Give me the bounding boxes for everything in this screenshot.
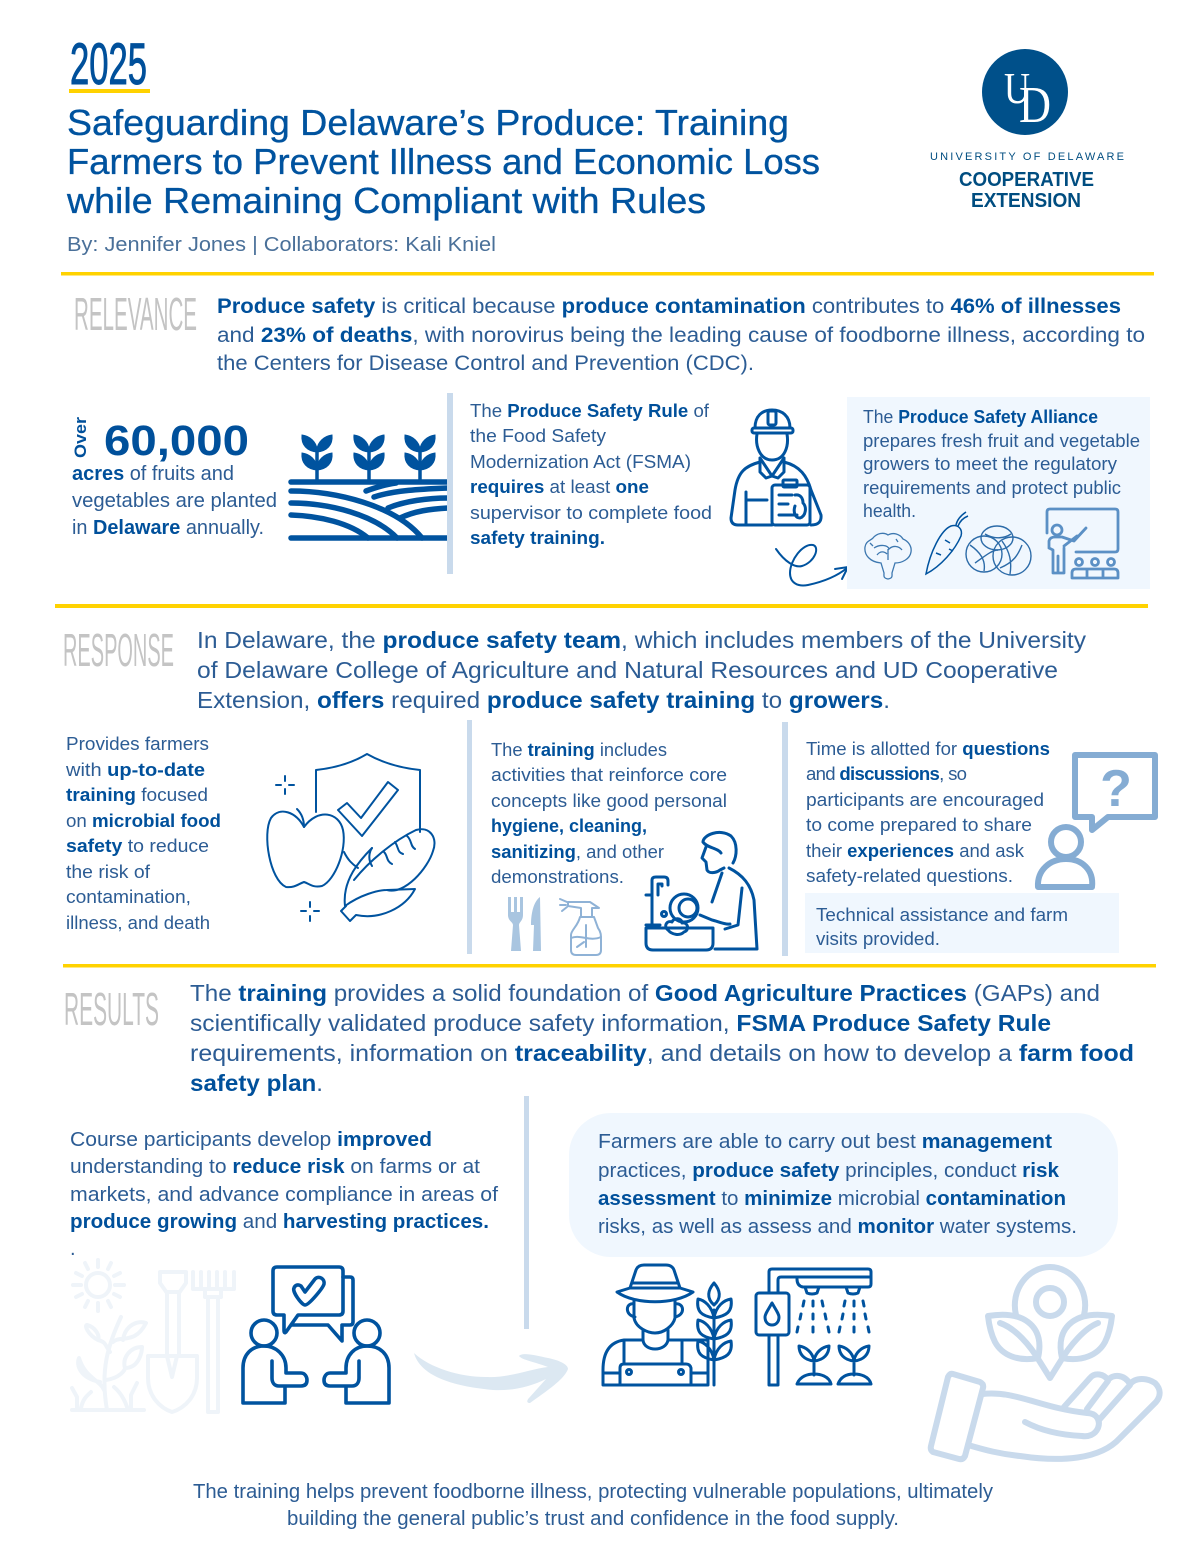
stat: 60,000 acres: in Delaware annually. bbox=[72, 517, 264, 539]
icon: person with question bubble: ? bbox=[1100, 760, 1132, 818]
text: up-to-date training: with up-to-date bbox=[65, 759, 205, 780]
text: produce safety rule: supervisor to complete food bbox=[470, 502, 712, 523]
icon: person washing dishes bbox=[646, 832, 757, 950]
byline: By: Jennifer Jones | Collaborators: Kali Kniel bbox=[67, 234, 496, 256]
text: training activities: demonstrations. bbox=[491, 866, 624, 887]
closing statement: The training helps prevent foodborne illness, protecting vulnerable populations, ultimately bbox=[193, 1481, 993, 1503]
title: while Remaining Compliant with Rules bbox=[66, 180, 706, 221]
text: course participants: . bbox=[70, 1238, 76, 1260]
callout: farmers outcomes: Farmers are able to carry out best management bbox=[598, 1131, 1052, 1153]
icon: fork and knife bbox=[508, 897, 541, 951]
response intro text: Extension, offers required produce safety training to growers. bbox=[197, 687, 890, 713]
text: up-to-date training: safety to reduce bbox=[66, 835, 209, 856]
relevance intro text: the Centers for Disease Control and Prevention (CDC). bbox=[217, 351, 754, 375]
logo: University of Delaware Cooperative Extension: EXTENSION bbox=[971, 190, 1081, 212]
year heading bbox=[69, 32, 150, 97]
text: training activities: concepts like good personal bbox=[491, 790, 727, 811]
text: questions and discussions bbox=[806, 738, 1050, 886]
text: questions and discussions: Time is allotted for questions bbox=[806, 738, 1050, 759]
icon: shield, apple and produce bbox=[267, 754, 434, 921]
closing statement bbox=[193, 1481, 993, 1530]
arrow: curved to outcomes bbox=[414, 1353, 568, 1403]
stat: 60,000 acres: 60,000 bbox=[104, 417, 249, 465]
text: questions and discussions: participants are encouraged bbox=[806, 789, 1044, 810]
callout: technical assistance: visits provided. bbox=[816, 928, 940, 949]
panel: results: RESULTS bbox=[64, 983, 159, 1035]
callout: farmers outcomes: assessment to minimize microbial contamination bbox=[598, 1188, 1066, 1210]
icon: two people discussing bbox=[243, 1267, 389, 1403]
logo: University of Delaware Cooperative Extension: UNIVERSITY OF DELAWARE bbox=[930, 151, 1124, 163]
text: produce safety rule: the Food Safety bbox=[470, 425, 607, 446]
year heading: 2025 bbox=[70, 32, 147, 97]
text: produce safety rule: safety training. bbox=[470, 527, 605, 548]
title: Safeguarding Delaware’s Produce: Training bbox=[67, 102, 789, 143]
text: up-to-date training: contamination, bbox=[66, 886, 191, 907]
text: produce safety rule bbox=[470, 400, 712, 548]
text: up-to-date training: the risk of bbox=[66, 861, 151, 882]
results intro text bbox=[190, 980, 1134, 1096]
response intro text bbox=[197, 627, 1087, 713]
text: course participants bbox=[70, 1129, 498, 1260]
callout: technical assistance: Technical assistance and farm bbox=[816, 904, 1068, 925]
callout: farmers outcomes bbox=[569, 1113, 1118, 1257]
arrow: scribble bbox=[776, 545, 848, 586]
icon: water sprinkler and seedlings bbox=[756, 1269, 871, 1385]
text: up-to-date training: illness, and death bbox=[66, 912, 210, 933]
logo: University of Delaware Cooperative Extension: U bbox=[1004, 64, 1030, 113]
closing statement: building the general public’s trust and confidence in the food supply. bbox=[287, 1508, 899, 1530]
panel: produce safety alliance: The Produce Safety Alliance bbox=[863, 407, 1098, 427]
text: questions and discussions: safety-related questions. bbox=[806, 865, 1013, 886]
logo: University of Delaware Cooperative Extension: COOPERATIVE bbox=[959, 169, 1094, 191]
stat: 60,000 acres bbox=[71, 417, 277, 539]
panel: produce safety alliance: requirements and protect public bbox=[863, 478, 1121, 498]
panel: results bbox=[64, 980, 1160, 1459]
icon: crop field bbox=[291, 435, 448, 538]
text: produce safety rule: Modernization Act (FSMA) bbox=[470, 451, 691, 472]
title: Farmers to Prevent Illness and Economic Loss bbox=[67, 141, 820, 182]
text: training activities bbox=[491, 739, 727, 887]
text: up-to-date training: Provides farmers bbox=[66, 733, 209, 754]
text: up-to-date training: training focused bbox=[66, 784, 208, 805]
text: up-to-date training bbox=[65, 733, 221, 933]
stat: 60,000 acres: acres of fruits and bbox=[72, 463, 234, 485]
text: training activities: The training includes bbox=[491, 739, 667, 760]
text: training activities: sanitizing, and other bbox=[491, 841, 664, 862]
relevance intro text: and 23% of deaths , with norovirus being the leading cause of foodborne illness, according to bbox=[217, 323, 1145, 347]
response intro text: In Delaware, the produce safety team , which includes members of the University bbox=[197, 627, 1087, 653]
text: produce safety rule: The Produce Safety Rule of bbox=[470, 400, 710, 421]
text: course participants: markets, and advance compliance in areas of bbox=[70, 1184, 498, 1206]
icon: spray bottle bbox=[560, 899, 601, 955]
panel: produce safety alliance: health. bbox=[863, 501, 916, 521]
title bbox=[66, 102, 820, 221]
text: questions and discussions: their experiences and ask bbox=[806, 840, 1025, 861]
icon: hand holding plant bbox=[931, 1267, 1160, 1459]
results intro text: The training provides a solid foundation of Good Agriculture Practices (GAPs) and bbox=[190, 980, 1100, 1006]
relevance intro text bbox=[217, 294, 1145, 375]
callout: farmers outcomes: risks, as well as assess and monitor water systems. bbox=[598, 1216, 1077, 1238]
results intro text: requirements, information on traceability , and details on how to develop a farm food bbox=[190, 1040, 1134, 1066]
icon: broccoli bbox=[865, 533, 911, 579]
icon: faded garden tools bbox=[72, 1260, 234, 1412]
text: training activities: activities that reinforce core bbox=[491, 764, 727, 785]
response intro text: of Delaware College of Agriculture and Natural Resources and UD Cooperative bbox=[197, 657, 1058, 683]
icon: carrot bbox=[926, 512, 968, 574]
icon: supervisor with clipboard bbox=[731, 410, 821, 525]
icon: cabbages bbox=[966, 526, 1031, 575]
panel: relevance bbox=[71, 288, 1150, 589]
text: questions and discussions: and discussions, so bbox=[806, 763, 967, 784]
stat: 60,000 acres: Over bbox=[71, 417, 90, 458]
text: course participants: understanding to reduce risk on farms or at bbox=[70, 1156, 480, 1178]
text: produce safety rule: requires at least one bbox=[470, 476, 649, 497]
callout: farmers outcomes: practices, produce safety principles, conduct risk bbox=[598, 1160, 1060, 1182]
panel: response bbox=[63, 624, 1155, 956]
panel: produce safety alliance: growers to meet the regulatory bbox=[863, 454, 1117, 474]
panel: produce safety alliance bbox=[847, 397, 1150, 589]
text: training activities: hygiene, cleaning, bbox=[491, 815, 647, 836]
text: course participants: produce growing and harvesting practices. bbox=[70, 1211, 489, 1233]
text: up-to-date training: on microbial food bbox=[66, 810, 221, 831]
logo: University of Delaware Cooperative Extension bbox=[930, 49, 1124, 212]
icon: farmer with wheat bbox=[603, 1265, 731, 1385]
logo: University of Delaware Cooperative Extension: D bbox=[1019, 77, 1051, 134]
stat: 60,000 acres: vegetables are planted bbox=[72, 490, 277, 512]
panel: produce safety alliance: prepares fresh fruit and vegetable bbox=[863, 431, 1140, 451]
results intro text: scientifically validated produce safety information, FSMA Produce Safety Rule bbox=[190, 1010, 1051, 1036]
text: questions and discussions: to come prepared to share bbox=[806, 814, 1032, 835]
panel: relevance: RELEVANCE bbox=[74, 288, 197, 340]
results intro text: safety plan . bbox=[190, 1070, 323, 1096]
panel: response: RESPONSE bbox=[63, 624, 174, 676]
icon: person with question bubble bbox=[1038, 755, 1155, 887]
callout: technical assistance bbox=[805, 893, 1119, 953]
text: course participants: Course participants develop improved bbox=[70, 1129, 432, 1151]
relevance intro text: Produce safety is critical because produce contamination contributes to 46% of illnesses bbox=[217, 294, 1121, 318]
icon: trainer at board bbox=[1047, 509, 1118, 578]
